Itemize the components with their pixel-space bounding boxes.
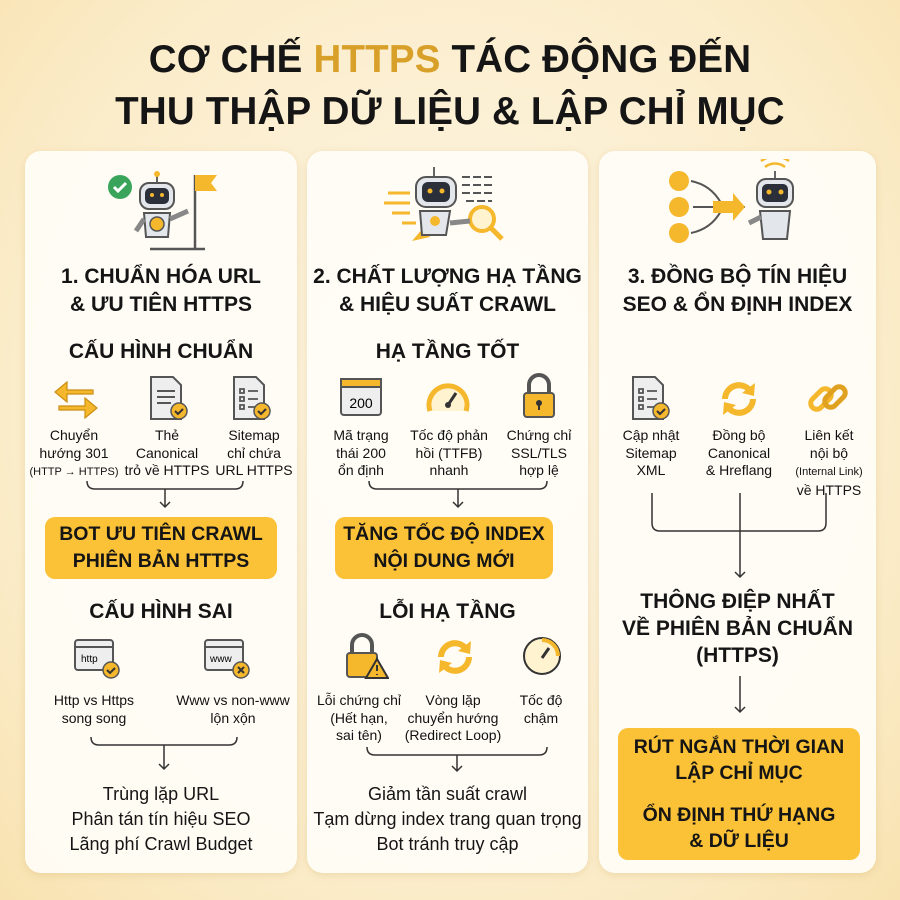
label: lỗi chứng chỉ: (Hết hạn,: [330, 710, 388, 726]
heading: 1. CHUẨN HÓA URL: [61, 265, 261, 288]
arrow: brace 2: [90, 737, 238, 770]
label: www: [176, 692, 290, 726]
icon: lock warning: [346, 633, 389, 679]
label: TTFB: [410, 427, 488, 478]
icon: 200 status: 200: [349, 395, 373, 411]
label: http vs https: song song: [62, 710, 126, 726]
label: chuyển hướng 301: (HTTP → HTTPS): [29, 466, 118, 478]
icon: arrows to robot: [669, 159, 794, 243]
label: internal link: [783, 427, 875, 499]
label: SSL: hợp lệ: [519, 462, 559, 478]
text: thông điệp nhất: THÔNG ĐIỆP NHẤT: [640, 590, 835, 613]
label: lỗi chứng chỉ: [317, 692, 401, 743]
label: vòng lặp: (Redirect Loop): [405, 727, 501, 743]
label: mã trạng thái: [333, 427, 389, 478]
label: internal link: về HTTPS: [797, 482, 861, 498]
icon: slow gauge: [523, 637, 561, 675]
title: THU THẬP DỮ LIỆU & LẬP CHỈ MỤC: [115, 90, 785, 133]
label: chuyển hướng 301: hướng 301: [39, 444, 109, 460]
icon: flying robot with magnifier: [384, 167, 504, 241]
heading: [623, 264, 852, 316]
icon: sitemap doc: [632, 376, 670, 420]
text: thông điệp nhất: (HTTPS): [696, 644, 779, 667]
label: sitemap: Cập nhật: [623, 427, 679, 443]
heading: 2. CHẤT LƯỢNG HẠ TẦNG: [313, 265, 582, 288]
icon: canonical doc: [150, 376, 188, 420]
icon: sync: [722, 382, 756, 416]
text: results 2: Bot tránh truy cập: [376, 834, 519, 854]
label: mã trạng thái: Mã trạng: [333, 427, 389, 443]
label: vòng lặp: [405, 692, 501, 743]
label: TTFB: hồi (TTFB): [416, 444, 482, 460]
label: www: lộn xộn: [210, 710, 256, 726]
label: mã trạng thái: ổn định: [338, 462, 384, 478]
label: mã trạng thái: thái 200: [336, 444, 386, 460]
text: thông điệp nhất: [599, 588, 876, 669]
label: tốc độ chậm: [520, 692, 562, 726]
text: results 1: Lãng phí Crawl Budget: [69, 834, 253, 854]
label: thẻ canonical: trỏ về HTTPS: [125, 462, 209, 478]
heading: & HIỆU SUẤT CRAWL: [339, 293, 556, 316]
heading: 3. ĐỒNG BỘ TÍN HIỆU: [628, 265, 847, 288]
label: sitemap: [215, 427, 293, 478]
label: internal link: (Internal Link): [795, 466, 863, 478]
heading: [313, 264, 582, 316]
label: internal link: nội bộ: [810, 444, 848, 460]
callout: tăng tốc độ index: [335, 517, 553, 579]
label: sitemap: URL HTTPS: [215, 462, 293, 478]
callout: result: LẬP CHỈ MỤC ỔN ĐỊNH THỨ HẠNG: [643, 762, 835, 826]
label: canonical hreflang: Đồng bộ: [713, 427, 765, 443]
text: results 1: Trùng lặp URL: [103, 784, 219, 804]
icon: gauge: [426, 383, 470, 412]
icon: robot with flag: [108, 171, 217, 250]
label: internal link: Liên kết: [804, 427, 854, 443]
icon: lock: [523, 373, 555, 418]
label: vòng lặp: chuyển hướng: [408, 710, 498, 726]
callout: result: RÚT NGẮN THỜI GIAN: [634, 736, 844, 758]
text: results 1: Phân tán tín hiệu SEO: [71, 809, 251, 829]
text: thông điệp nhất: VỀ PHIÊN BẢN CHUẨN: [622, 617, 853, 640]
icon: www window: www: [209, 654, 232, 665]
label: TTFB: nhanh: [430, 462, 468, 478]
label: thẻ canonical: [124, 427, 209, 478]
subheading: cấu hình chuẩn: CẤU HÌNH CHUẨN: [69, 340, 253, 363]
label: thẻ canonical: Canonical: [136, 444, 198, 460]
title: [115, 37, 785, 133]
label: canonical hreflang: [706, 427, 772, 478]
callout: tăng tốc độ index: NỘI DUNG MỚI: [373, 550, 515, 572]
arrow: down: [730, 676, 750, 716]
text: results 1: [69, 784, 253, 854]
label: sitemap: [623, 427, 680, 478]
icon: redirect arrows: [54, 380, 98, 420]
arrow: brace 1: [86, 481, 244, 508]
heading: [61, 264, 261, 316]
label: canonical hreflang: & Hreflang: [706, 462, 772, 478]
icon: redirect loop: [438, 640, 472, 674]
label: sitemap: Sitemap: [625, 444, 677, 460]
label: canonical hreflang: Canonical: [708, 444, 770, 460]
label: thẻ canonical: Thẻ: [155, 427, 179, 443]
label: lỗi chứng chỉ: sai tên): [336, 727, 382, 743]
arrow: brace 1: [368, 481, 548, 508]
icon: http window: [74, 639, 120, 679]
subheading: cấu hình sai: CẤU HÌNH SAI: [89, 600, 233, 623]
title: CƠ CHẾ HTTPS TÁC ĐỘNG ĐẾN: [149, 38, 751, 81]
label: tốc độ chậm: Tốc độ: [520, 692, 562, 708]
callout: result: & DỮ LIỆU: [689, 830, 789, 852]
label: vòng lặp: Vòng lặp: [425, 692, 481, 708]
panel: 2 chất lượng hạ tầng: [307, 151, 588, 873]
callout: bot ưu tiên: PHIÊN BẢN HTTPS: [73, 550, 249, 572]
arrow: converge lines: [639, 493, 839, 583]
label: http vs https: [54, 692, 134, 726]
label: SSL: [507, 427, 572, 478]
heading: SEO & ỔN ĐỊNH INDEX: [623, 293, 852, 316]
label: SSL: SSL/TLS: [511, 444, 567, 460]
text: results 2: Giảm tần suất crawl: [368, 784, 527, 804]
label: sitemap: chỉ chứa: [227, 444, 281, 460]
label: lỗi chứng chỉ: Lỗi chứng chỉ: [317, 692, 401, 708]
heading: & ƯU TIÊN HTTPS: [70, 293, 252, 316]
icon: http window: http: [81, 654, 98, 665]
label: http vs https: Http vs Https: [54, 692, 134, 708]
callout: tăng tốc độ index: TĂNG TỐC ĐỘ INDEX: [343, 523, 545, 545]
label: TTFB: Tốc độ phản: [410, 427, 488, 443]
label: chuyển hướng 301: Chuyển: [50, 427, 98, 443]
label: chuyển hướng 301: [29, 427, 118, 478]
text: results 2: Tạm dừng index trang quan trọng: [313, 809, 582, 829]
icon: www window: [204, 639, 250, 679]
panel: 1 chuẩn hóa URL: [25, 151, 297, 873]
label: www: Www vs non-www: [176, 692, 290, 708]
label: sitemap: XML: [637, 462, 665, 478]
label: tốc độ chậm: chậm: [524, 710, 558, 726]
text: results 2: [313, 784, 582, 854]
callout: bot ưu tiên: [45, 517, 277, 579]
icon: chain link: [808, 384, 848, 412]
callout: bot ưu tiên: BOT ƯU TIÊN CRAWL: [59, 523, 263, 545]
callout: result: [618, 728, 860, 860]
subheading: hạ tầng tốt: HẠ TẦNG TỐT: [376, 340, 519, 363]
icon: 200 status: [340, 378, 382, 416]
icon: sitemap doc: [233, 376, 271, 420]
arrow: brace 2: [366, 747, 548, 772]
panel: 3 đồng bộ tín hiệu: [599, 151, 876, 873]
label: sitemap: Sitemap: [228, 427, 280, 443]
label: SSL: Chứng chỉ: [507, 427, 571, 443]
subheading: lỗi hạ tầng: LỖI HẠ TẦNG: [379, 600, 516, 623]
